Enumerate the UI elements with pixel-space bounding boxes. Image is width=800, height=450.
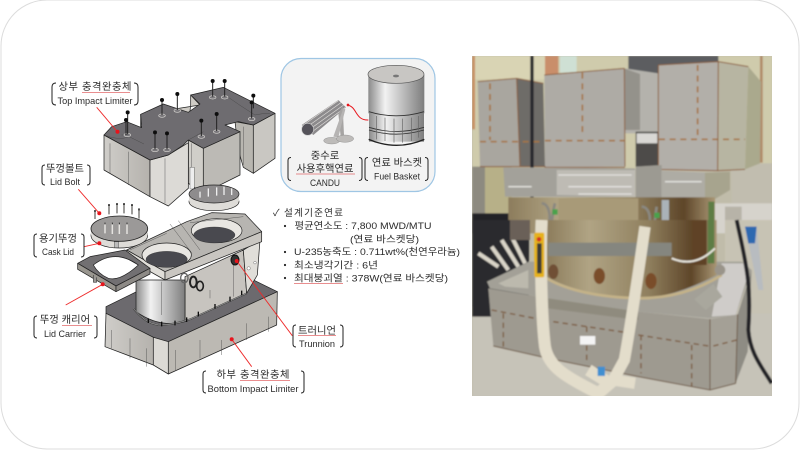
text block: design basis fuel: 최소냉각기간 : 6년 xyxy=(294,260,378,272)
label: trunnion xyxy=(293,325,343,350)
label: lid carrier: Lid Carrier xyxy=(44,329,86,340)
back limiter parts xyxy=(625,68,658,133)
label: bottom impact limiter: 하부 충격완충체 xyxy=(216,368,290,381)
text block: design basis fuel: (연료 바스켓당) xyxy=(350,234,419,246)
label: lid bolt: 뚜껑볼트 xyxy=(46,163,84,175)
icon: fuel basket xyxy=(368,65,424,145)
red leader lines xyxy=(66,107,292,367)
text block: design basis fuel: 평균연소도 : 7,800 MWD/MTU xyxy=(294,221,432,232)
yellow pendant controller xyxy=(534,233,544,277)
shackles xyxy=(542,203,555,230)
text block: design basis fuel: 설계기준연료 xyxy=(284,208,343,219)
cask body xyxy=(133,240,260,326)
icon: CANDU fuel bundle xyxy=(302,100,368,144)
label: CANDU: 사용후핵연료 xyxy=(297,163,353,175)
label: lid bolt xyxy=(42,163,90,188)
label: fuel basket xyxy=(365,157,428,182)
label: CANDU xyxy=(288,150,362,189)
bolts xyxy=(124,79,255,152)
limiter faces xyxy=(488,288,710,390)
text block: design basis fuel xyxy=(273,208,460,284)
pole xyxy=(530,56,534,203)
photo: test cask with impact limiters xyxy=(472,56,772,397)
label: lid carrier xyxy=(34,314,97,340)
label: top impact limiter xyxy=(52,80,138,107)
label: CANDU: 중수로 xyxy=(311,150,339,162)
label: cask lid xyxy=(34,233,84,258)
left box xyxy=(478,78,520,167)
black cable xyxy=(737,220,772,383)
text block: design basis fuel: 최대붕괴열 : 378W(연료 바스켓당) xyxy=(294,274,448,284)
lid bolts xyxy=(95,203,139,219)
cask lower xyxy=(547,220,717,298)
right box xyxy=(658,62,718,171)
label: trunnion: Trunnion xyxy=(299,339,335,350)
middle band xyxy=(503,167,635,197)
text block: design basis fuel: U-235농축도 : 0.711wt%(천연우라늄) xyxy=(294,247,460,258)
label: top impact limiter: Top Impact Limiter xyxy=(58,96,132,107)
trunnion rings xyxy=(181,255,239,291)
diagram: cask body, lid and bottom limiter xyxy=(78,203,277,374)
label: CANDU: CANDU xyxy=(310,178,340,189)
label: cask lid: Cask Lid xyxy=(42,247,74,258)
label: trunnion: 트러니언 xyxy=(298,325,336,337)
label: lid bolt: Lid Bolt xyxy=(50,177,80,188)
steel cask upper xyxy=(508,197,715,233)
diagram: top impact limiter xyxy=(104,79,275,211)
label: lid carrier: 뚜껑 캐리어 xyxy=(40,314,90,326)
lid carrier xyxy=(78,250,150,292)
upper cask lid xyxy=(189,185,239,211)
label: fuel basket: 연료 바스켓 xyxy=(372,157,422,169)
bottom limiter xyxy=(105,277,277,374)
label: top impact limiter: 상부 충격완충체 xyxy=(58,80,132,93)
upper photo section xyxy=(472,56,772,233)
top of limiter xyxy=(487,262,752,318)
weld seams xyxy=(480,65,745,142)
center box xyxy=(544,68,625,167)
top frame xyxy=(127,213,262,280)
label: cask lid: 용기뚜껑 xyxy=(39,233,77,245)
panel: fuel basket and CANDU fuel xyxy=(281,58,435,192)
label: fuel basket: Fuel Basket xyxy=(374,172,420,182)
lower photo section xyxy=(472,220,772,397)
label: bottom impact limiter: Bottom Impact Limiter xyxy=(208,384,298,395)
cask lid xyxy=(91,216,148,248)
lifting slings xyxy=(541,220,610,393)
label: bottom impact limiter xyxy=(203,368,304,395)
text block: design basis fuel: ✓ xyxy=(273,208,280,219)
